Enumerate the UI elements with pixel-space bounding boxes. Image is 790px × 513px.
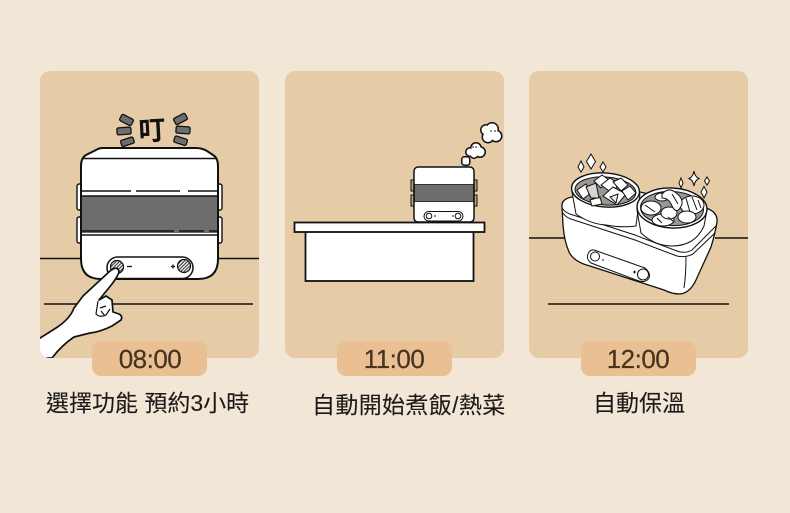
caption: step 1: 選擇功能 預約3小時 bbox=[46, 390, 249, 416]
time badge: 11:00: 11:00 bbox=[364, 344, 424, 374]
floor lines bbox=[529, 238, 748, 304]
time badge: 12:00: 12:00 bbox=[607, 344, 669, 374]
time badge: 11:00 bbox=[337, 341, 452, 376]
panel: step 3 at 12:00 bbox=[529, 71, 748, 358]
floor lines bbox=[40, 258, 259, 304]
icon: steam clouds bbox=[462, 124, 501, 164]
control panel bbox=[587, 250, 650, 282]
icon: ding sound marks bbox=[117, 113, 190, 147]
illustration: rice cooker front view bbox=[77, 148, 222, 279]
panel: step 1 at 08:00 bbox=[37, 71, 259, 358]
panel: step 2 at 11:00 bbox=[285, 71, 504, 358]
caption: step 3: 自動保溫 bbox=[593, 390, 685, 416]
right bowl with dumplings and shrimp bbox=[636, 186, 708, 246]
control panel bbox=[107, 257, 193, 278]
time badge: 08:00 bbox=[92, 341, 207, 376]
icon: pointing hand bbox=[37, 268, 122, 358]
illustration: table bbox=[294, 222, 484, 281]
caption: step 2: 自動開始煮飯/熱菜 bbox=[312, 392, 506, 418]
icon: ding sound marks: 叮 bbox=[138, 115, 166, 147]
icon: sparkles bbox=[578, 154, 710, 198]
illustration: small rice cooker bbox=[411, 167, 477, 222]
time badge: 12:00 bbox=[581, 341, 696, 376]
time badge: 08:00: 08:00 bbox=[119, 344, 181, 374]
illustration: open cooker with food bbox=[562, 171, 717, 294]
left bowl with cubes bbox=[570, 171, 641, 227]
